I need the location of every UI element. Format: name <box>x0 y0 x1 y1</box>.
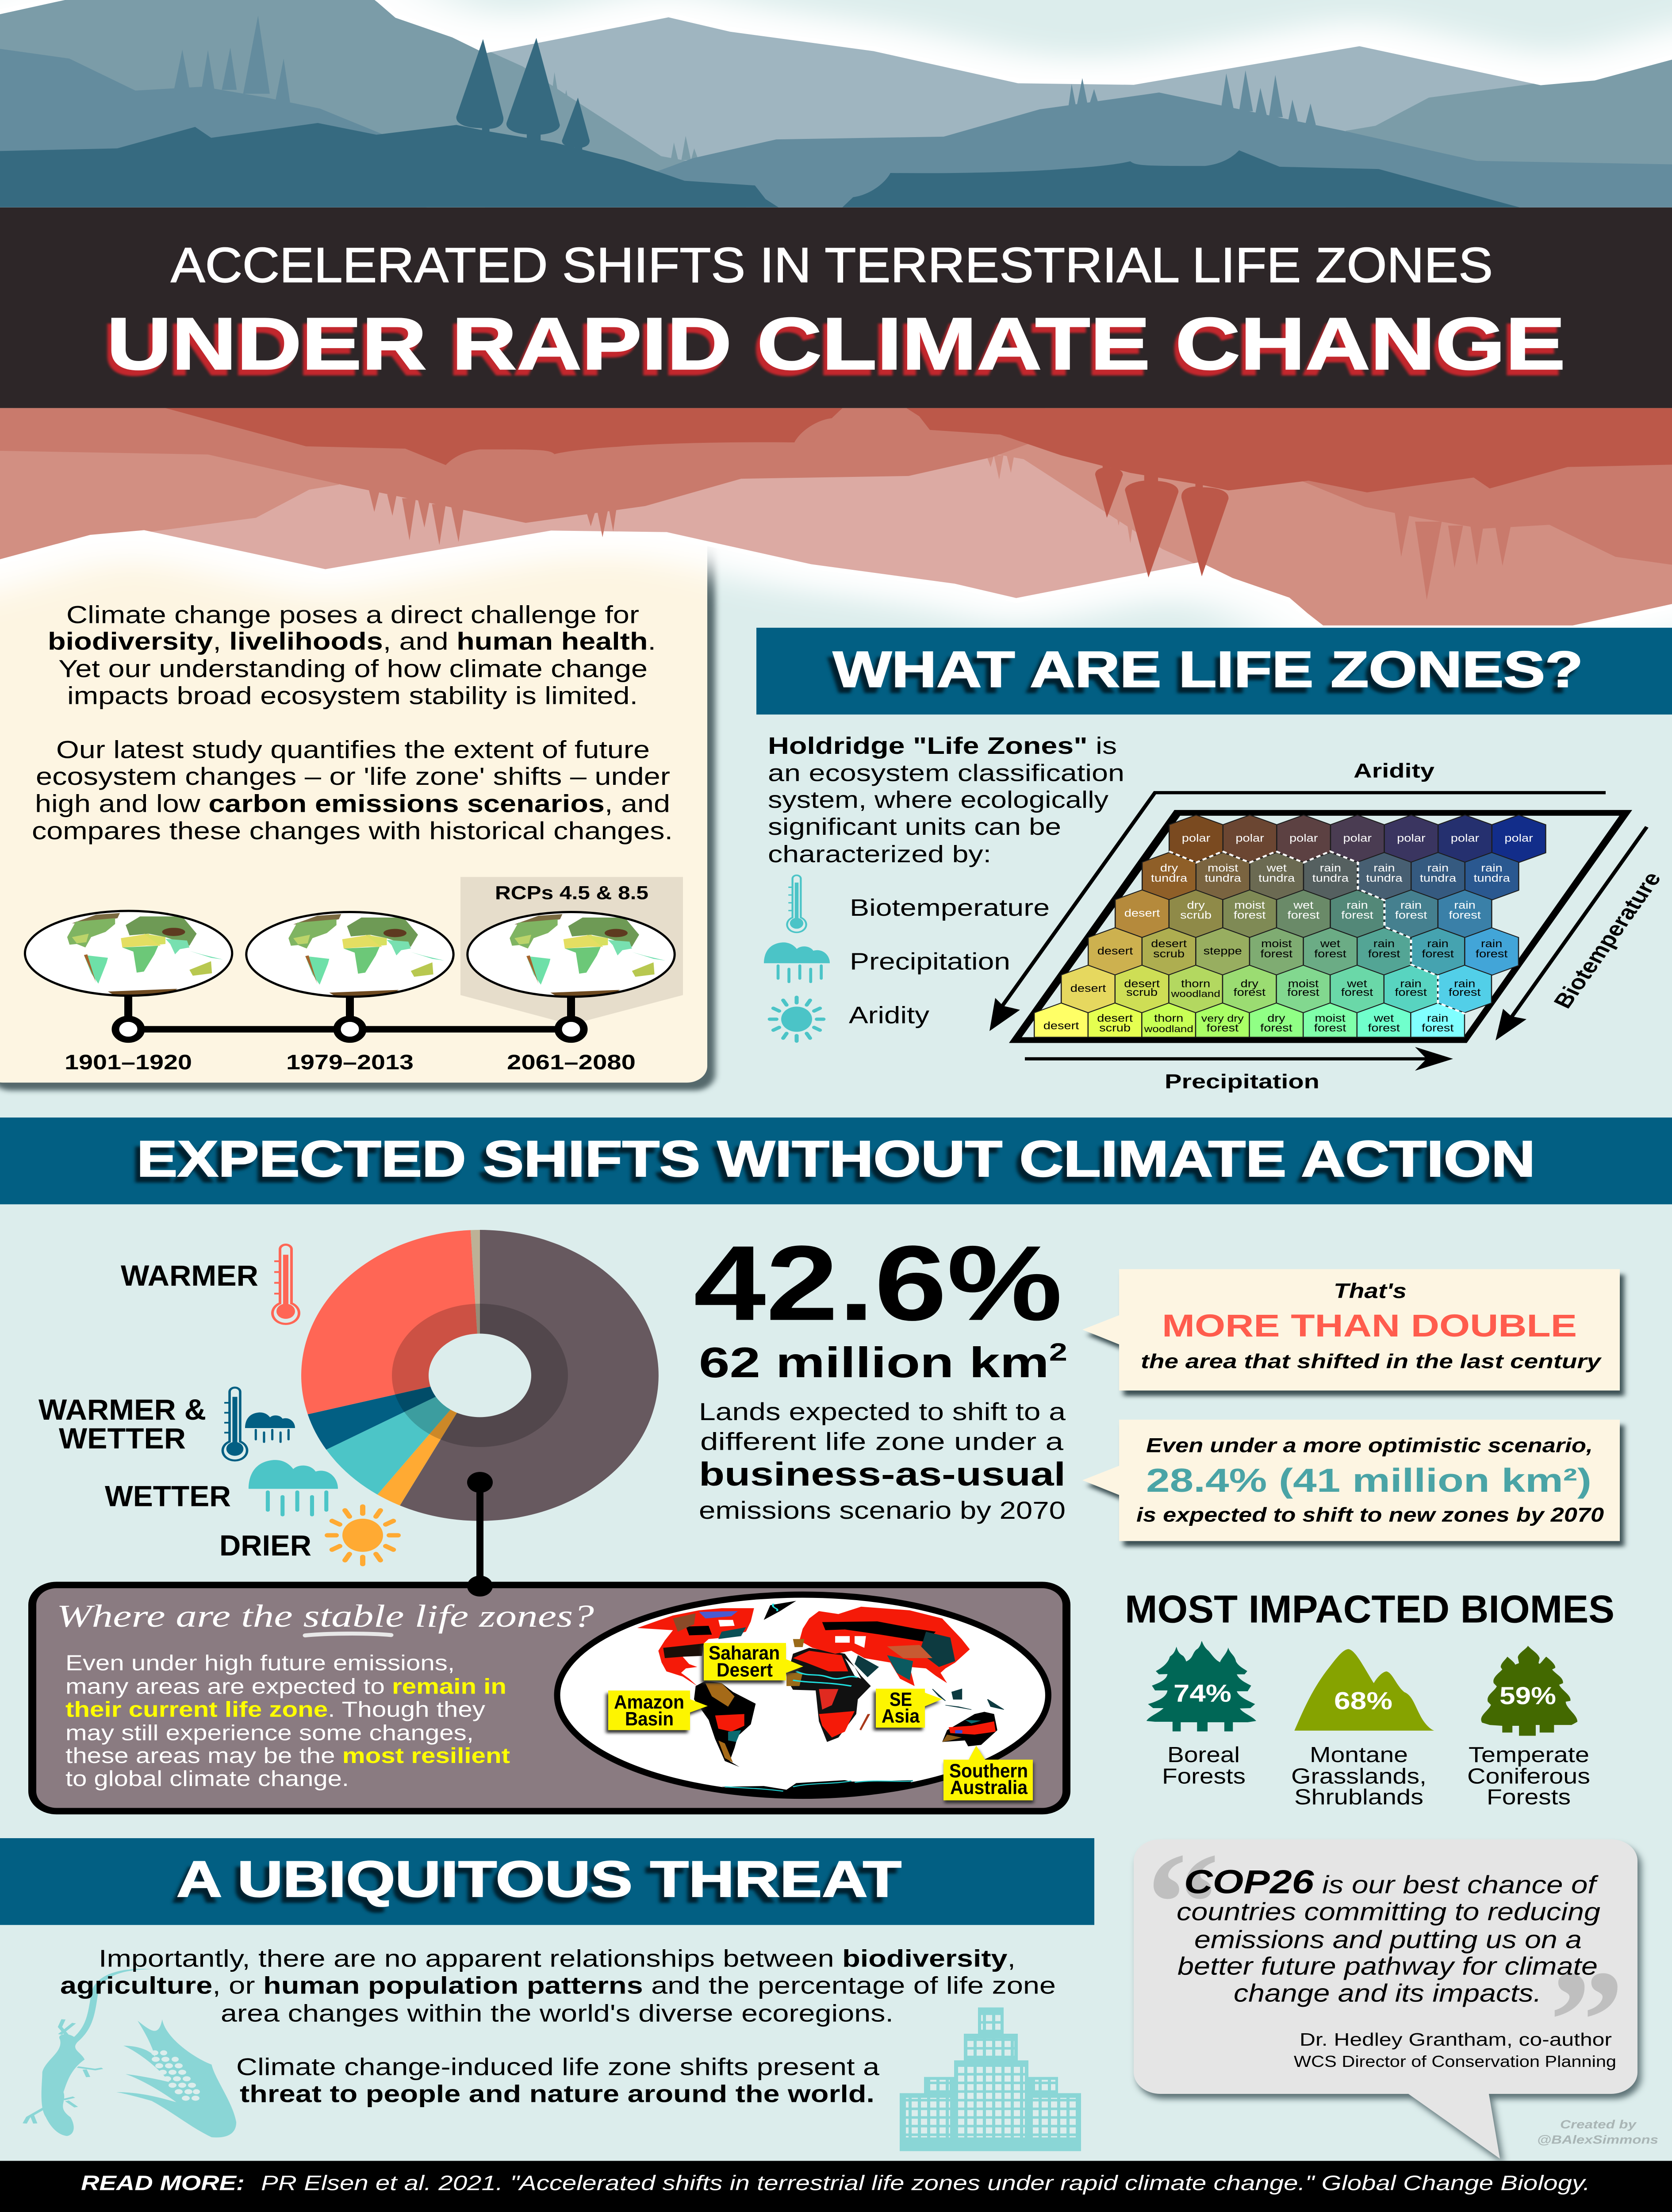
callout: more than double: That's <box>1334 1279 1407 1303</box>
label: WARMER & WETTER: WARMER & <box>38 1393 206 1426</box>
hex row: fifth <box>1061 965 1492 1013</box>
hex row: third: forest <box>1449 909 1481 921</box>
map: Greenland <box>764 1601 796 1620</box>
hexagon chart <box>1009 810 1632 1043</box>
hex row: fourth: steppe <box>1204 945 1242 957</box>
hex row: sixth: wet <box>1373 1012 1394 1024</box>
hex row: third: rain <box>1346 899 1368 911</box>
section: what are life zones <box>756 628 1672 1093</box>
Holdridge text: significant units can be <box>768 814 1061 840</box>
label: Aridity axis: Aridity <box>1354 760 1435 782</box>
hex row: fifth: forest <box>1395 986 1427 998</box>
hex row: fourth: rain <box>1373 938 1395 949</box>
hex row: fourth: forest <box>1422 948 1454 960</box>
creator credit: Created by <box>1560 2118 1637 2131</box>
dashed boundary <box>1169 851 1465 1014</box>
area statistic: 62 million km <box>699 1339 1030 1386</box>
label: boreal forests: Forests <box>1162 1764 1246 1788</box>
hex row: sixth: dry <box>1267 1012 1285 1024</box>
icon: temperate trees <box>1481 1646 1577 1736</box>
panel body text: may still experience some changes, <box>65 1720 474 1745</box>
hex row: tundra: tundra <box>1312 872 1349 884</box>
hex row: polar: polar <box>1451 832 1479 844</box>
label: montane grasslands: Grasslands, <box>1291 1764 1427 1788</box>
label: boreal forests <box>1162 1743 1246 1788</box>
arrow: aridity <box>989 793 1606 1031</box>
slice: warmer <box>301 1230 480 1414</box>
hex row: fourth: desert <box>1151 938 1187 949</box>
hex row: third: forest <box>1234 909 1266 921</box>
intro text: study: high and low carbon emissions scenarios, and <box>35 791 670 818</box>
hex row: third: moist <box>1235 899 1266 911</box>
map: Africa <box>786 1648 871 1742</box>
hex row: tundra: tundra <box>1473 872 1510 884</box>
arrow: biotemperature <box>1496 827 1647 1041</box>
hex row: tundra: moist <box>1208 862 1239 874</box>
icon: lizard <box>25 1969 152 2136</box>
hex row: fifth: dry <box>1241 978 1259 990</box>
hex row: polar: polar <box>1504 832 1533 844</box>
hex row: fifth: desert <box>1070 983 1106 994</box>
hex row: tundra <box>1142 853 1519 900</box>
hex row: sixth: forest <box>1260 1022 1292 1034</box>
panel body text: to global climate change. <box>65 1766 349 1791</box>
hex row: fourth: rain <box>1481 938 1502 949</box>
hex row: polar: polar <box>1397 832 1426 844</box>
connector to stable panel <box>476 1482 483 1586</box>
hex row: tundra: rain <box>1481 862 1503 874</box>
hex row: fifth: forest <box>1234 986 1266 998</box>
callout: Amazon Basin: Amazon <box>614 1692 684 1713</box>
threat text 2 <box>236 2054 879 2107</box>
hex row: sixth: desert <box>1097 1012 1133 1024</box>
montane percentage: 68% <box>1334 1687 1392 1715</box>
hex row: fifth: woodland <box>1170 989 1220 999</box>
callout: Southern Australia: Southern <box>949 1760 1028 1782</box>
threat text 1 <box>60 1945 1056 2027</box>
hex row: fourth <box>1088 928 1519 975</box>
hex row: fourth: desert <box>1097 945 1133 957</box>
hex row: tundra: wet <box>1266 862 1287 874</box>
timeline <box>115 994 584 1040</box>
hex row: sixth: desert <box>1043 1020 1079 1032</box>
hex row: third: forest <box>1395 909 1427 921</box>
callout: Saharan Desert: Saharan <box>709 1643 780 1664</box>
label: temperate coniferous: Coniferous <box>1467 1764 1590 1788</box>
hex row: sixth: woodland <box>1143 1024 1193 1034</box>
quote text: COP26 is our best chance of <box>1184 1863 1599 1901</box>
hex row: sixth: thorn <box>1154 1012 1183 1024</box>
stable zones world map <box>557 1594 1048 1796</box>
hex row: fifth: wet <box>1346 978 1367 990</box>
hex row: polar: polar <box>1182 832 1210 844</box>
panel title: Where are the stable life zones? <box>57 1599 594 1634</box>
hex row: sixth: rain <box>1427 1012 1448 1024</box>
threat text 2: Climate change-induced life zone shifts present a <box>236 2054 879 2080</box>
attribution name: Dr. Hedley Grantham, co-author <box>1300 2029 1612 2050</box>
callout: SE Asia <box>876 1689 942 1728</box>
hex row: third: wet <box>1293 899 1314 911</box>
label: WARMER: WARMER <box>121 1259 258 1292</box>
hex row: tundra: tundra <box>1151 872 1187 884</box>
threat text 1: Importantly, there are no apparent relationships between biodiversity, <box>99 1945 1016 1972</box>
hex row: tundra: dry <box>1160 862 1178 874</box>
map 1901-1920 <box>25 911 232 996</box>
Holdridge text: an ecosystem classification <box>768 760 1124 786</box>
callout: more than double <box>1082 1269 1620 1390</box>
Holdridge text: characterized by: <box>768 841 991 867</box>
callout: optimistic scenario: is expected to shift to new zones by 2070 <box>1136 1503 1604 1526</box>
hex row: fifth: scrub <box>1126 986 1158 998</box>
callout: Saharan Desert: Desert <box>717 1659 773 1681</box>
creator credit: @BAlexSimmons <box>1537 2133 1658 2147</box>
label: montane grasslands: Montane <box>1310 1743 1408 1767</box>
threat text 2: threat to people and nature around the world. <box>240 2081 874 2107</box>
label: WARMER & WETTER: WETTER <box>59 1422 186 1455</box>
label: Biotemperature axis: Biotemperature <box>1548 868 1666 1012</box>
hex row: fourth: forest <box>1368 948 1400 960</box>
hex row: sixth: very dry <box>1201 1014 1244 1024</box>
slice: warmer and wetter <box>308 1375 480 1450</box>
hex row: polar: polar <box>1343 832 1372 844</box>
map: North America <box>637 1608 754 1686</box>
connector dot on panel <box>467 1576 493 1597</box>
hex row: sixth: forest <box>1422 1022 1454 1034</box>
slice: drier <box>377 1375 480 1505</box>
callout: SE Asia: Asia <box>882 1705 920 1727</box>
label: temperate coniferous <box>1467 1743 1590 1809</box>
label: WARMER & WETTER <box>38 1393 206 1455</box>
panel body text <box>65 1651 510 1791</box>
RCP label: RCPs 4.5 & 8.5 <box>495 883 648 904</box>
hex row: third: desert <box>1124 907 1160 919</box>
map: Eurasia <box>793 1607 970 1686</box>
heading band <box>0 1838 1094 1925</box>
hex row: fifth: rain <box>1454 978 1475 990</box>
hex row: polar: polar <box>1235 832 1264 844</box>
quote text: countries committing to reducing <box>1177 1898 1600 1926</box>
hex row: polar <box>1169 815 1545 863</box>
map: Antarctica <box>721 1780 913 1796</box>
slice: other <box>471 1230 480 1375</box>
threat text 1: agriculture, or human population patterns and the percentage of life zone <box>60 1972 1056 1999</box>
title band <box>0 207 1672 408</box>
label: temperate coniferous: Forests <box>1487 1785 1571 1809</box>
callout: more than double: the area that shifted in the last century <box>1141 1350 1602 1372</box>
hex row: fourth: scrub <box>1153 948 1185 960</box>
panel body text: these areas may be the most resilient <box>65 1743 510 1768</box>
slice: stable <box>400 1230 659 1521</box>
icon: boreal trees <box>1147 1641 1256 1732</box>
label: Precipitation: Precipitation <box>850 948 1010 975</box>
hex row: sixth: scrub <box>1099 1022 1131 1034</box>
attribution role: WCS Director of Conservation Planning <box>1294 2053 1616 2070</box>
map 2061-2080 <box>468 912 675 997</box>
label: montane grasslands: Shrublands <box>1294 1785 1423 1809</box>
heading band: expected shifts <box>0 1118 1672 1204</box>
connector dot <box>467 1472 493 1493</box>
heading band <box>756 628 1672 714</box>
intro text: study <box>32 737 673 845</box>
statistic description: emissions scenario by 2070 <box>699 1497 1066 1524</box>
hex row: sixth: forest <box>1207 1022 1239 1034</box>
label: WETTER: WETTER <box>105 1480 231 1513</box>
intro text: challenge: Yet our understanding of how climate change <box>58 655 648 683</box>
boreal percentage: 74% <box>1173 1680 1231 1707</box>
heading band: A UBIQUITOUS THREAT <box>176 1851 901 1908</box>
icon: sun <box>770 997 824 1041</box>
label: Biotemperature: Biotemperature <box>850 895 1050 921</box>
hex row: third: forest <box>1288 909 1320 921</box>
icon: city buildings <box>900 2008 1081 2151</box>
callout: Amazon Basin <box>608 1690 708 1730</box>
statistic description: different life zone under a <box>700 1428 1064 1455</box>
intro text: challenge <box>48 601 656 710</box>
creator credit <box>1537 2118 1658 2147</box>
intro text: study: ecosystem changes – or 'life zone' shifts – under <box>36 763 670 790</box>
timeline labels: 1979–2013 <box>286 1051 414 1074</box>
footer bar: READ MORE: <box>81 2171 245 2195</box>
hex row: fifth: thorn <box>1181 978 1210 990</box>
intro text: study: compares these changes with historical changes. <box>32 818 673 845</box>
callout: optimistic scenario <box>1082 1420 1620 1541</box>
intro text: challenge: Climate change poses a direct challenge for <box>66 601 639 629</box>
icon: corn <box>116 2020 236 2138</box>
title line 2: UNDER RAPID CLIMATE CHANGE <box>107 303 1565 385</box>
threat text 1: area changes within the world's diverse ecoregions. <box>221 2000 894 2027</box>
icon: blue cloud <box>245 1413 295 1442</box>
map 1979-2013 <box>246 912 453 997</box>
hex row: fifth: forest <box>1341 986 1373 998</box>
timeline labels: 1901–1920 <box>65 1051 192 1074</box>
hex row: tundra: tundra <box>1258 872 1295 884</box>
temperate percentage: 59% <box>1499 1682 1556 1710</box>
RCP future tag <box>460 877 683 1025</box>
panel body text: their current life zone. Though they <box>65 1697 486 1721</box>
hex row: sixth: forest <box>1314 1022 1346 1034</box>
hex row: fourth: forest <box>1261 948 1293 960</box>
hex row: sixth: moist <box>1315 1012 1346 1024</box>
label: Precipitation axis: Precipitation <box>1165 1070 1319 1093</box>
teal mountains <box>0 0 1672 207</box>
callout: Saharan Desert <box>704 1643 803 1681</box>
quote text: change and its impacts. <box>1234 1980 1542 2007</box>
opening quote mark: “ <box>1147 1823 1219 1982</box>
label: DRIER: DRIER <box>219 1529 311 1562</box>
icon: red thermometer <box>272 1244 299 1324</box>
icon: mountains <box>1294 1649 1434 1731</box>
panel: introduction <box>0 468 707 1083</box>
slice: wetter <box>326 1375 480 1494</box>
statistic description <box>699 1398 1066 1524</box>
icon: blue thermometer <box>222 1387 247 1460</box>
hex row: third: rain <box>1400 899 1422 911</box>
hex row: fourth: moist <box>1261 938 1292 949</box>
Holdridge text: Holdridge "Life Zones" is <box>768 733 1117 759</box>
timeline labels: 2061–2080 <box>507 1051 636 1074</box>
hex row: fifth: forest <box>1287 986 1319 998</box>
Holdridge text <box>768 733 1124 867</box>
footer bar: PR Elsen et al. 2021. "Accelerated shifts in terrestrial life zones under rapid climate change." Global Change Biology. <box>261 2171 1590 2195</box>
quote text <box>1177 1863 1600 2007</box>
title underline <box>305 1634 391 1636</box>
callout: SE Asia: SE <box>890 1689 912 1710</box>
hex row: third: dry <box>1187 899 1205 911</box>
hex row: polar: polar <box>1289 832 1318 844</box>
panel body text: many areas are expected to remain in <box>65 1674 506 1698</box>
intro text: challenge: biodiversity, livelihoods, and human health. <box>48 628 656 655</box>
hex row: tundra: rain <box>1320 862 1341 874</box>
red reflected mountains <box>0 408 1672 628</box>
hex row: tundra: tundra <box>1204 872 1241 884</box>
section: ubiquitous threat <box>0 1838 1094 2151</box>
quote text: emissions and putting us on a <box>1194 1926 1582 1954</box>
timeline labels <box>65 1051 636 1074</box>
hex row: third: rain <box>1454 899 1476 911</box>
label: temperate coniferous: Temperate <box>1469 1743 1589 1767</box>
heading band: WHAT ARE LIFE ZONES? <box>833 641 1583 698</box>
label: montane grasslands <box>1291 1743 1427 1809</box>
big statistic: 42.6% <box>694 1224 1062 1343</box>
hex row: fourth: forest <box>1314 948 1346 960</box>
icon: teal cloud <box>249 1460 338 1515</box>
map: Australia <box>942 1712 997 1746</box>
hex row: fifth: desert <box>1124 978 1160 990</box>
hex row: tundra: tundra <box>1420 872 1456 884</box>
section: most impacted biomes <box>1125 1587 1614 1809</box>
heading band: expected shifts: EXPECTED SHIFTS WITHOUT CLIMATE ACTION <box>137 1131 1535 1187</box>
intro text: study: Our latest study quantifies the extent of future <box>56 737 650 764</box>
callout: more than double: MORE THAN DOUBLE <box>1162 1308 1577 1344</box>
label: boreal forests: Boreal <box>1167 1743 1240 1767</box>
quote bubble <box>1134 1823 1637 2159</box>
hex row: third: forest <box>1341 909 1373 921</box>
hex row: fifth: forest <box>1449 986 1481 998</box>
callout: Southern Australia <box>943 1746 1033 1801</box>
callout: Amazon Basin: Basin <box>625 1709 674 1730</box>
hex row: sixth: forest <box>1368 1022 1400 1034</box>
hex row: fifth: moist <box>1288 978 1319 990</box>
quote text: better future pathway for climate <box>1177 1953 1598 1980</box>
hex row: fourth: wet <box>1320 938 1341 949</box>
hex row: tundra: tundra <box>1366 872 1403 884</box>
statistic description: Lands expected to shift to a <box>699 1398 1066 1425</box>
area statistic: 2 <box>1049 1338 1067 1366</box>
hex row: sixth <box>1034 1003 1465 1037</box>
arrow: precipitation <box>1025 1047 1453 1071</box>
closing quote mark: ” <box>1549 1941 1624 2100</box>
icon: orange sun <box>327 1506 398 1564</box>
panel: stable life zones <box>32 1576 1066 1811</box>
icon: rain cloud <box>764 942 830 982</box>
callout: optimistic scenario: 28.4% (41 million km²) <box>1146 1462 1591 1499</box>
callout: Southern Australia: Australia <box>950 1777 1028 1798</box>
Holdridge text: system, where ecologically <box>768 787 1108 813</box>
footer bar <box>0 2161 1672 2212</box>
donut chart <box>301 1230 659 1521</box>
hex row: third: scrub <box>1180 909 1212 921</box>
hex row: fifth: rain <box>1400 978 1422 990</box>
hex row: fourth: forest <box>1476 948 1508 960</box>
icon: thermometer <box>787 876 806 933</box>
hex row: third <box>1115 890 1492 937</box>
intro text: challenge: impacts broad ecosystem stability is limited. <box>67 682 638 710</box>
statistic description: business-as-usual <box>699 1455 1066 1493</box>
panel body text: Even under high future emissions, <box>65 1651 455 1675</box>
map: South America <box>694 1681 755 1767</box>
hex row: tundra: rain <box>1373 862 1395 874</box>
callout: optimistic scenario: Even under a more optimistic scenario, <box>1146 1434 1593 1456</box>
parallelogram frame <box>1009 810 1632 1043</box>
label: Aridity: Aridity <box>849 1002 929 1028</box>
hex row: tundra: rain <box>1427 862 1449 874</box>
map: islands <box>932 1689 1004 1709</box>
hex row: fourth: rain <box>1427 938 1449 949</box>
